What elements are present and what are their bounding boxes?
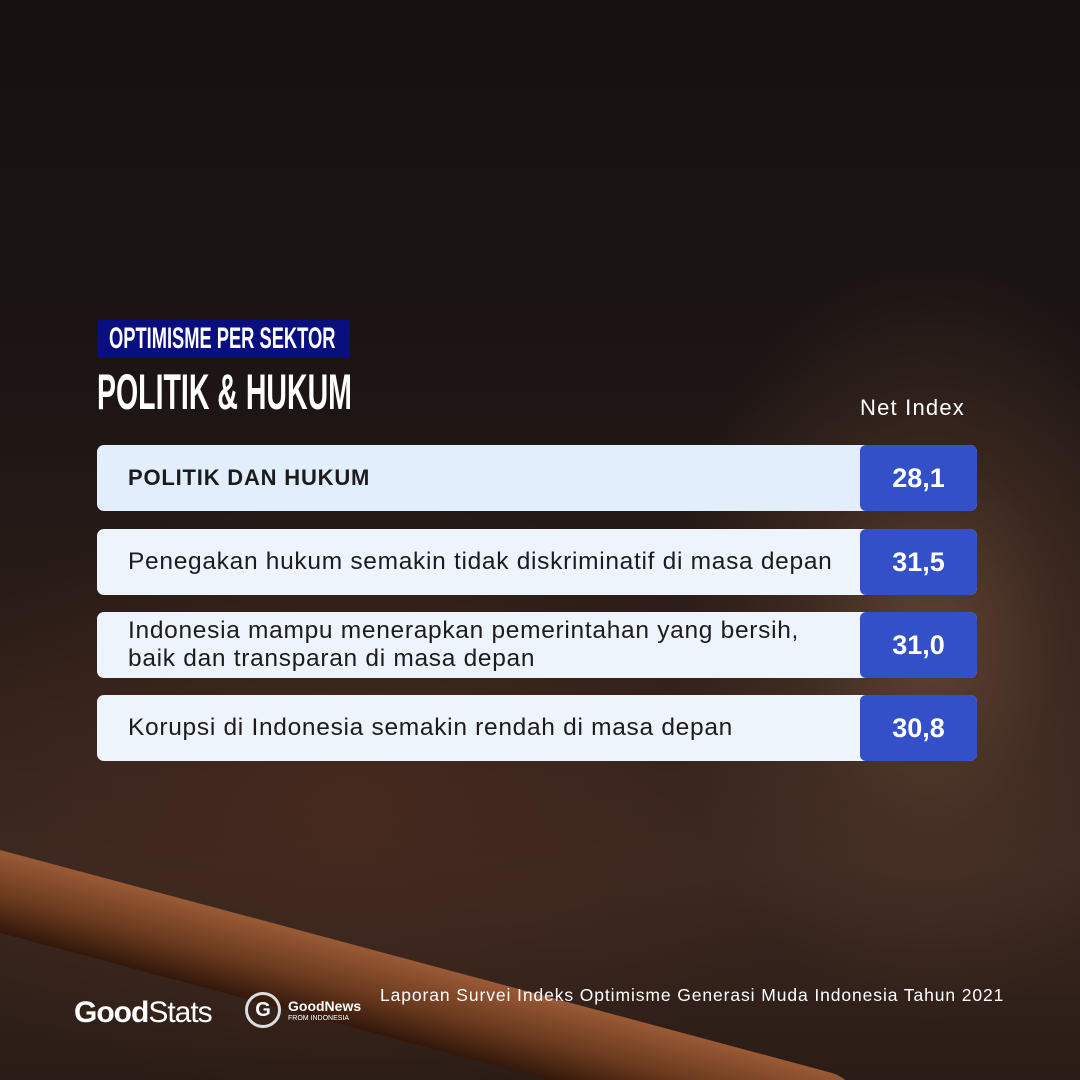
row 2: 31,5 — [892, 546, 945, 576]
logo: goodnews: G — [255, 999, 271, 1021]
logo: goodstats: GoodStats — [74, 996, 212, 1029]
row 4: Korupsi di Indonesia semakin rendah di masa depan — [128, 714, 733, 741]
logo: goodnews — [245, 992, 361, 1028]
row 3: 31,0 — [892, 630, 945, 660]
logo: goodnews: FROM INDONESIA — [288, 1015, 349, 1022]
row 3: baik dan transparan di masa depan — [128, 645, 535, 672]
column header: net index: Net Index — [860, 395, 965, 420]
logo: goodnews: GoodNews — [288, 998, 361, 1014]
row 1: POLITIK DAN HUKUM — [128, 465, 370, 490]
row 3: Indonesia mampu menerapkan pemerintahan yang bersih, — [128, 617, 799, 644]
badge: optimisme per sektor: OPTIMISME PER SEKTOR — [109, 322, 335, 355]
row 1: 28,1 — [892, 462, 945, 492]
row 4: 30,8 — [892, 712, 945, 742]
row 2: Penegakan hukum semakin tidak diskriminatif di masa depan — [128, 548, 832, 575]
row 4 — [97, 695, 977, 761]
source text: Laporan Survei Indeks Optimisme Generasi Muda Indonesia Tahun 2021 — [380, 985, 1004, 1005]
row 2 — [97, 529, 977, 595]
title: POLITIK & HUKUM — [97, 364, 352, 420]
row 1 — [97, 445, 977, 511]
row 3 — [97, 612, 977, 678]
